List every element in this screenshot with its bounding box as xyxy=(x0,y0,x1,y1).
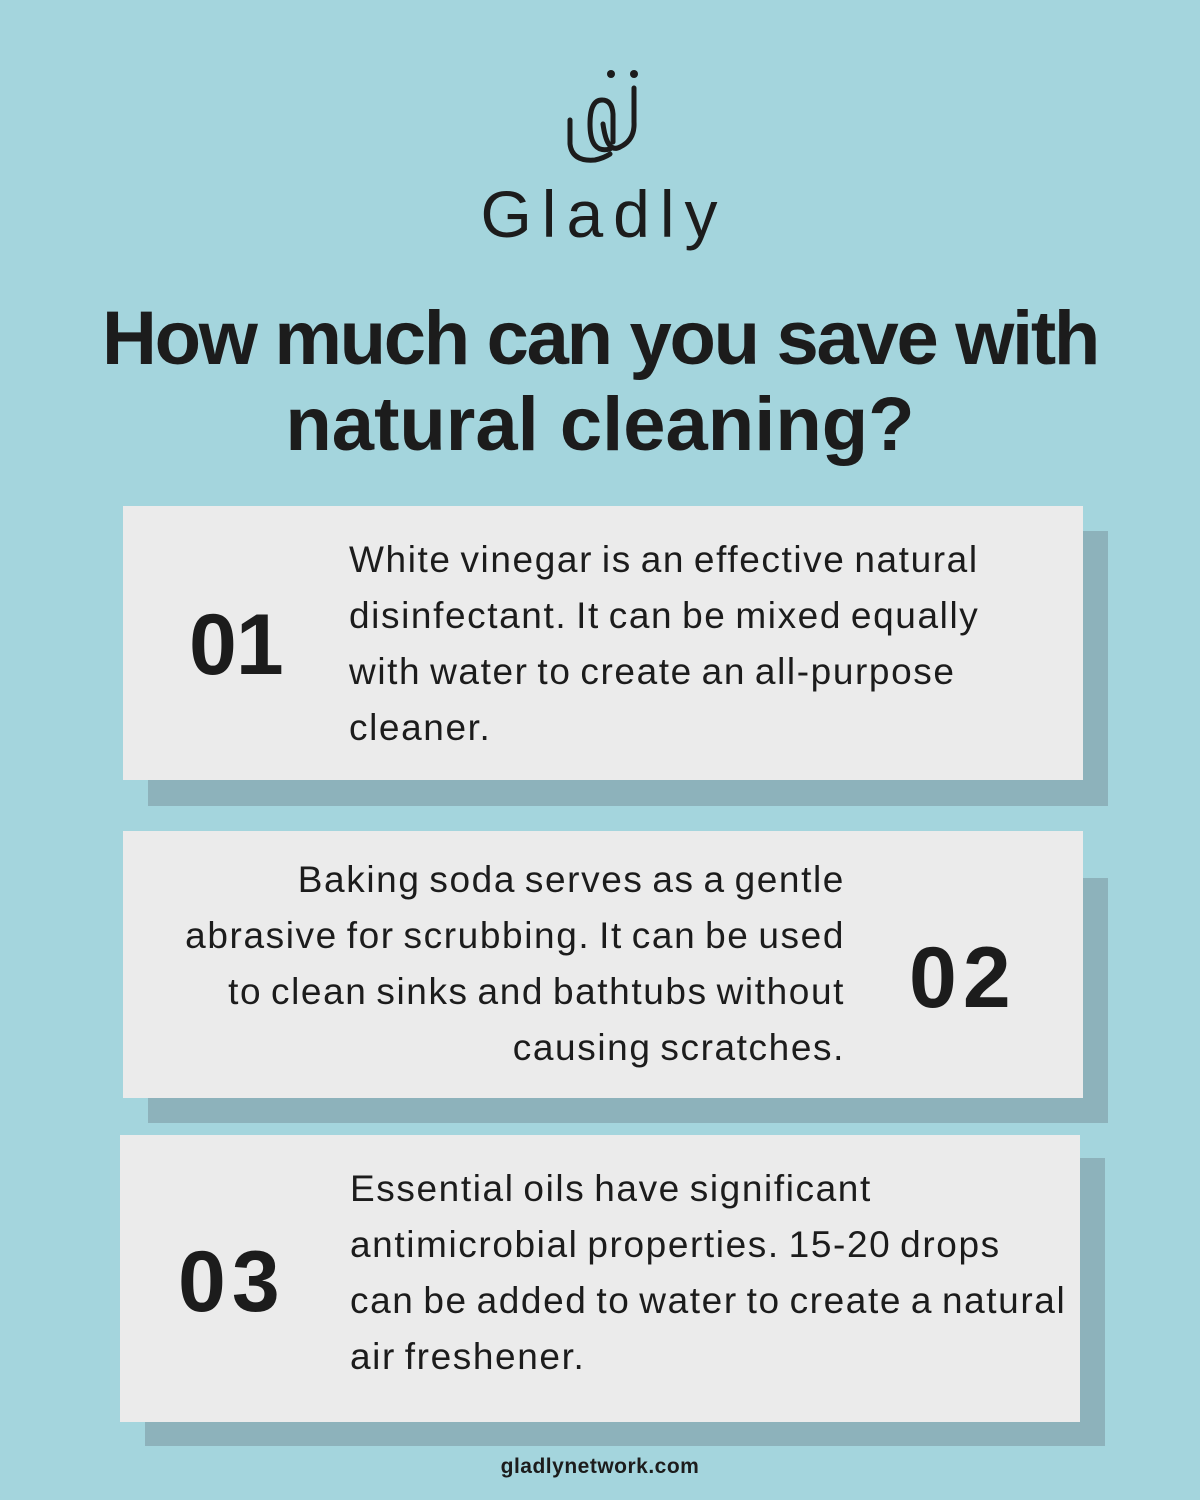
text 1 xyxy=(349,539,979,748)
text 2 xyxy=(185,859,845,1068)
text 3: can be added to water to create a natural xyxy=(350,1280,1066,1321)
text 1: with water to create an all-purpose xyxy=(349,651,956,692)
text 3: air freshener. xyxy=(350,1336,585,1377)
logo icon xyxy=(568,70,638,163)
card 3 xyxy=(120,1135,1105,1446)
title: natural cleaning? xyxy=(285,382,915,467)
text 2: abrasive for scrubbing. It can be used xyxy=(185,915,845,956)
number 01: 01 xyxy=(189,597,283,693)
text 3 xyxy=(350,1168,1066,1377)
number 03: 03 xyxy=(178,1234,286,1330)
text 2: to clean sinks and bathtubs without xyxy=(228,971,845,1012)
text 3: antimicrobial properties. 15-20 drops xyxy=(350,1224,1001,1265)
text 2: Baking soda serves as a gentle xyxy=(298,859,845,900)
footer url: gladlynetwork.com xyxy=(501,1455,699,1478)
text 1: disinfectant. It can be mixed equally xyxy=(349,595,979,636)
brand name: Gladly xyxy=(480,177,728,251)
card 2 xyxy=(123,831,1108,1123)
title xyxy=(102,296,1098,467)
text 1: cleaner. xyxy=(349,707,491,748)
card 1 xyxy=(123,506,1108,806)
text 1: White vinegar is an effective natural xyxy=(349,539,979,580)
title: How much can you save with xyxy=(102,296,1098,381)
text 3: Essential oils have significant xyxy=(350,1168,872,1209)
text 2: causing scratches. xyxy=(513,1027,845,1068)
number 02: 02 xyxy=(909,930,1017,1026)
